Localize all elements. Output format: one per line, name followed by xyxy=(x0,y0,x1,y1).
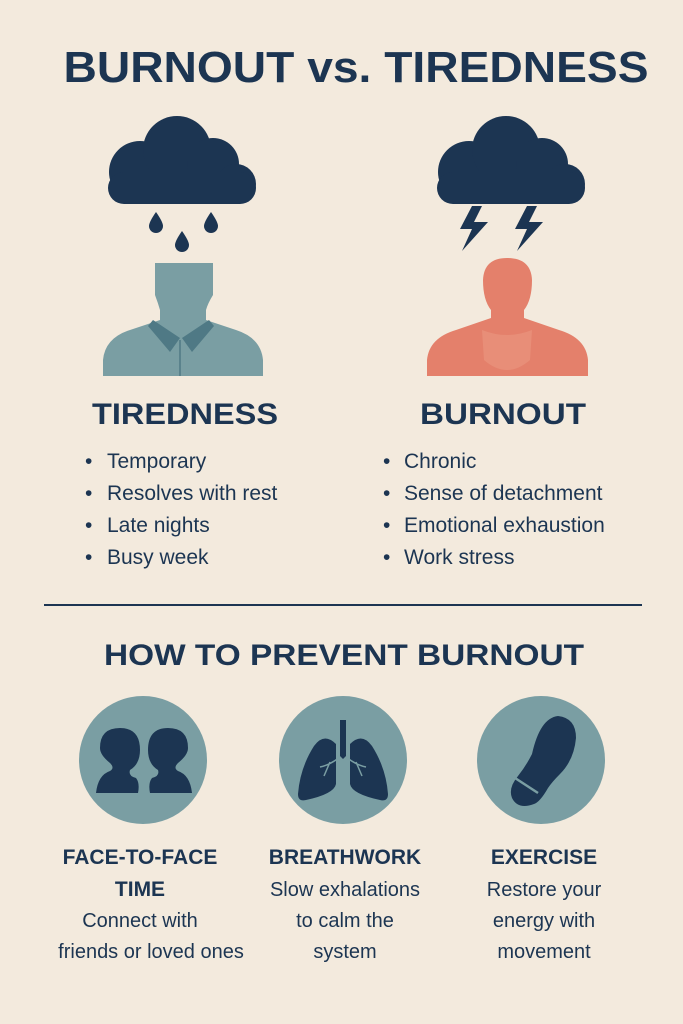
icon: lungs xyxy=(279,696,407,824)
heading: burnout: BURNOUT xyxy=(420,398,586,431)
list: tiredness: Busy week xyxy=(107,546,209,569)
list: burnout: Emotional exhaustion xyxy=(404,514,605,537)
item: exercise xyxy=(487,846,602,963)
item: face-to-face time: friends or loved ones xyxy=(58,941,244,963)
list: tiredness: • xyxy=(85,546,92,569)
list: tiredness: Late nights xyxy=(107,514,210,537)
list: burnout: • xyxy=(383,450,390,473)
title: BURNOUT vs. TIREDNESS xyxy=(64,43,649,92)
icon: two people xyxy=(79,696,207,824)
list: burnout: • xyxy=(383,482,390,505)
list: tiredness xyxy=(85,450,278,569)
item: breathwork xyxy=(269,846,421,963)
list: tiredness: • xyxy=(85,450,92,473)
item: face-to-face time: FACE-TO-FACE xyxy=(63,846,217,869)
icon: footprint xyxy=(477,696,605,824)
heading: tiredness: TIREDNESS xyxy=(92,398,278,431)
list: burnout: Chronic xyxy=(404,450,476,473)
icon: burnout person xyxy=(427,258,588,376)
item: face-to-face time: Connect with xyxy=(82,910,198,932)
heading: how to prevent burnout: HOW TO PREVENT BURNOUT xyxy=(104,639,584,672)
item: face-to-face time xyxy=(58,846,244,963)
list: burnout: • xyxy=(383,546,390,569)
item: breathwork: BREATHWORK xyxy=(269,846,421,869)
icon: tired person xyxy=(103,263,263,376)
item: exercise: EXERCISE xyxy=(491,846,597,869)
list: tiredness: • xyxy=(85,482,92,505)
list: tiredness: • xyxy=(85,514,92,537)
item: face-to-face time: TIME xyxy=(115,878,165,901)
list: burnout: Work stress xyxy=(404,546,514,569)
list: burnout: • xyxy=(383,514,390,537)
item: breathwork: Slow exhalations xyxy=(270,879,420,901)
icon: storm cloud xyxy=(437,116,585,251)
item: breathwork: system xyxy=(313,941,377,963)
item: breathwork: to calm the xyxy=(296,910,394,932)
list: burnout xyxy=(383,450,605,569)
list: burnout: Sense of detachment xyxy=(404,482,603,505)
item: exercise: Restore your xyxy=(487,879,602,901)
item: exercise: energy with xyxy=(493,910,595,932)
icon: rain cloud xyxy=(108,116,256,252)
item: exercise: movement xyxy=(497,941,591,963)
list: tiredness: Resolves with rest xyxy=(107,482,278,505)
list: tiredness: Temporary xyxy=(107,450,207,473)
